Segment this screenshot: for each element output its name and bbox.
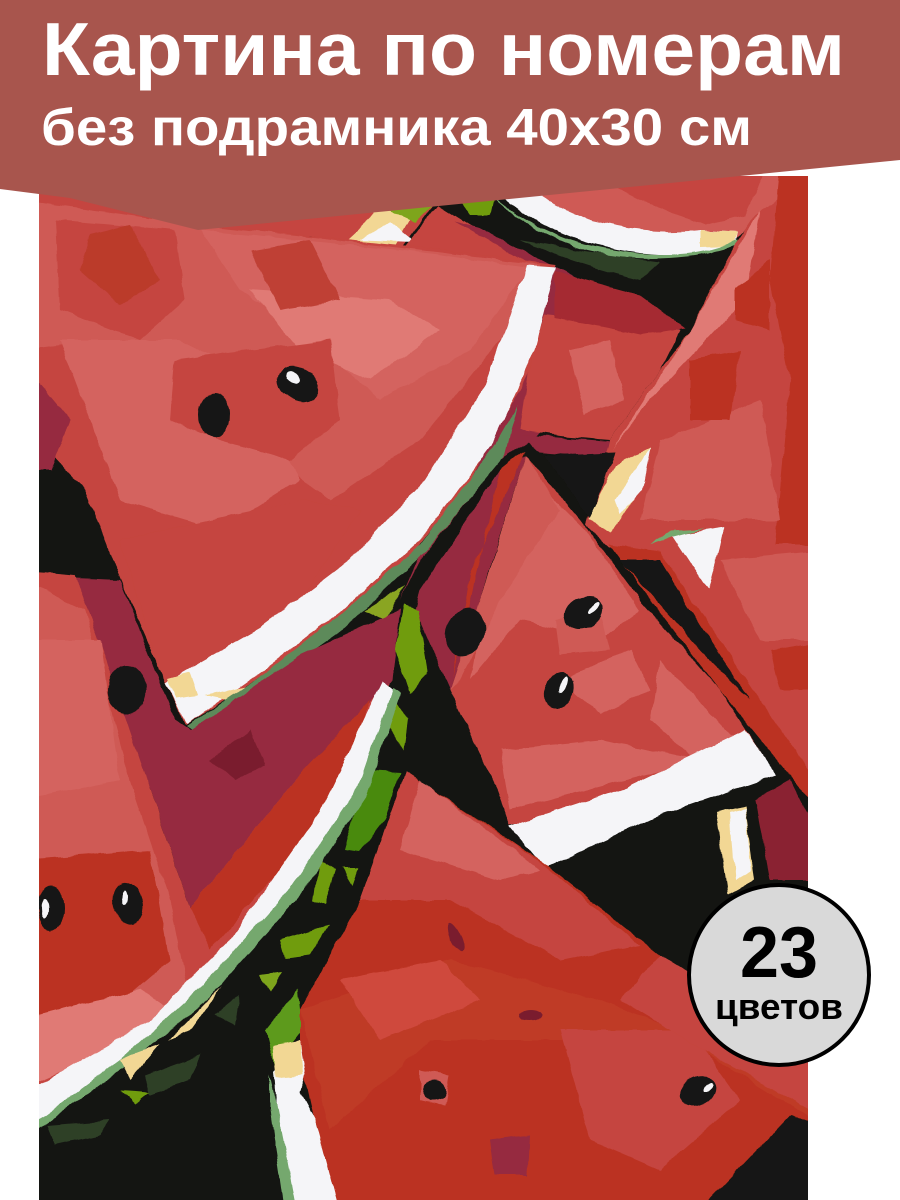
badge number: 23 xyxy=(740,913,818,993)
bottom slice seeds xyxy=(422,920,721,1113)
large top slice flesh xyxy=(20,170,555,725)
centre slice seeds xyxy=(444,596,603,709)
title: Картина по номерам xyxy=(42,7,845,91)
centre slice xyxy=(450,450,775,825)
bottom slice xyxy=(300,772,830,1200)
red underlay behind top edge xyxy=(223,206,433,246)
lower left seeds xyxy=(38,664,148,930)
right slice xyxy=(564,176,808,548)
small centre slice xyxy=(520,272,685,458)
maroon patch behind top slices xyxy=(400,222,680,600)
lower right slice xyxy=(610,527,830,815)
bottom slice rind xyxy=(270,1040,340,1200)
badge: 23 colours xyxy=(689,885,869,1065)
painting: watermelon slices xyxy=(20,160,830,1200)
small rind top centre xyxy=(348,206,526,261)
top banner xyxy=(0,0,900,230)
seeds on large slice xyxy=(198,366,318,438)
subtitle: без подрамника 40х30 см xyxy=(41,99,752,157)
top right slice with rind xyxy=(462,176,779,280)
lower left slice: rind xyxy=(20,682,400,1142)
bottom right dark corner xyxy=(708,1115,808,1200)
centre slice rind xyxy=(510,730,776,868)
lower left slice: flesh xyxy=(20,570,388,1095)
badge caption: цветов xyxy=(715,986,843,1027)
large top slice rind xyxy=(166,266,556,735)
melon rind green patches centre xyxy=(258,605,428,1065)
lower left slice: maroon flesh xyxy=(75,578,400,908)
right lower rind behind centre slice xyxy=(716,779,808,894)
centre maroon gap xyxy=(415,455,525,690)
dark patches on black xyxy=(47,995,240,1145)
